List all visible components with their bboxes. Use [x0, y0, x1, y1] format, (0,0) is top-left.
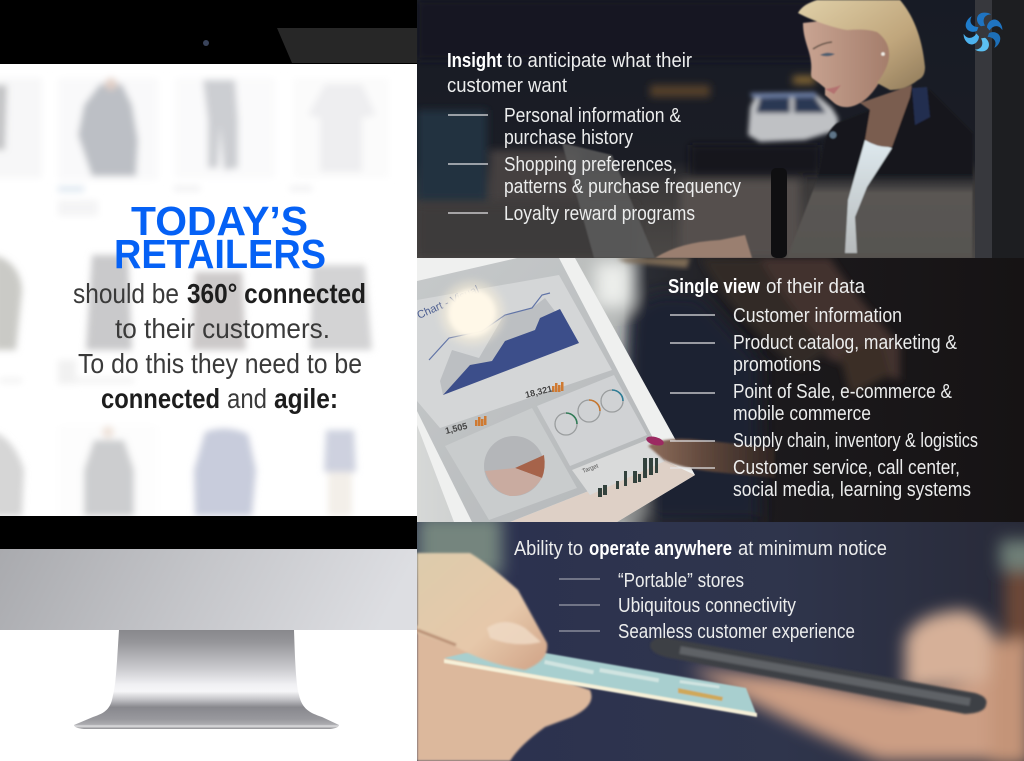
heading: today's retailers: RETAILERS — [114, 231, 326, 277]
dashboard cards — [417, 275, 665, 520]
neck — [860, 85, 912, 147]
phone — [650, 638, 987, 714]
thumb — [417, 553, 547, 670]
woman figure — [787, 0, 973, 258]
list: data items: Customer service, call center, — [733, 457, 960, 479]
text: single view heading — [668, 278, 866, 297]
hair — [798, 0, 925, 90]
window post — [975, 0, 992, 258]
list: data items: Customer information — [733, 305, 902, 327]
list: anywhere items — [559, 570, 855, 643]
list: insight items — [448, 105, 741, 225]
text: insight heading — [448, 52, 692, 92]
text: insight heading: customer want — [447, 75, 567, 97]
list: anywhere items: Ubiquitous connectivity — [618, 595, 796, 617]
intro text block: connected — [101, 383, 220, 414]
list: insight items: patterns & purchase frequency — [504, 176, 741, 198]
text: operate anywhere heading: Ability to — [514, 538, 583, 560]
intro text block: To do this they need to be — [78, 348, 362, 379]
monitor chin — [0, 549, 417, 630]
credit card — [444, 645, 757, 717]
chart labels: Target — [582, 463, 600, 475]
monitor illustration — [0, 0, 417, 729]
photo: tablet dashboard — [415, 258, 1024, 522]
text: insight heading: Insight — [447, 50, 502, 72]
photo: card payment — [417, 515, 1024, 761]
lens glare — [440, 281, 504, 345]
text: operate anywhere heading — [514, 540, 886, 559]
chart labels: Chart - Visual — [415, 284, 481, 322]
panel: insight — [417, 0, 1024, 258]
list: data items: promotions — [733, 354, 821, 376]
list: insight items: Personal information & — [504, 105, 682, 127]
list: data items: Point of Sale, e-commerce & — [733, 381, 953, 403]
intro text block: to their customers. — [115, 313, 330, 344]
hand on laptop — [655, 235, 752, 258]
pie chart — [484, 436, 544, 496]
list: data items — [670, 305, 978, 501]
intro text block: agile: — [274, 383, 338, 414]
text: operate anywhere heading: at minimum notice — [738, 538, 887, 560]
monitor bottom bezel — [0, 516, 417, 549]
bar charts — [598, 458, 658, 497]
heading: today's retailers — [114, 198, 326, 277]
text: single view heading: of their data — [766, 276, 866, 298]
list: anywhere items: “Portable” stores — [618, 570, 744, 592]
progress rings — [555, 390, 623, 435]
monitor top bezel — [0, 0, 417, 64]
chart labels: 18,321 — [524, 384, 553, 400]
list: data items: Product catalog, marketing & — [733, 332, 958, 354]
intro text block: should be — [73, 278, 179, 309]
chart labels: 1,505 — [444, 421, 468, 436]
monitor screen — [0, 64, 417, 516]
shirt — [845, 140, 892, 253]
photo: woman at laptop — [417, 0, 1024, 258]
monitor stand — [74, 630, 339, 729]
intro text block — [73, 278, 366, 414]
list: anywhere items: Seamless customer experience — [618, 621, 855, 643]
intro text block: 360° connected — [187, 278, 366, 309]
chart labels — [415, 284, 600, 475]
icon: company logo — [964, 12, 1002, 52]
heading: today's retailers: TODAY’S — [131, 198, 308, 244]
list: insight items: purchase history — [504, 127, 633, 149]
parked car — [748, 92, 838, 142]
icon: webcam — [203, 40, 209, 46]
area chart — [440, 298, 555, 395]
tablet body — [417, 258, 695, 522]
laptop — [562, 143, 655, 258]
text: single view heading: Single view — [668, 276, 760, 298]
blurred clothing catalogue — [0, 78, 389, 517]
bezel reflection — [510, 461, 695, 522]
list: data items: social media, learning systems — [733, 479, 971, 501]
text: insight heading: to anticipate what their — [507, 50, 692, 72]
panel: operate anywhere — [417, 515, 1024, 761]
tablet screen — [417, 258, 665, 522]
text: operate anywhere heading: operate anywhere — [589, 538, 732, 560]
bezel reflection wedge — [277, 28, 417, 63]
intro text block: and — [227, 383, 267, 414]
lower fingers — [417, 625, 592, 761]
jacket — [787, 88, 973, 258]
list: data items: mobile commerce — [733, 403, 871, 425]
finger pointing — [648, 439, 775, 478]
face — [803, 20, 892, 107]
list: insight items: Shopping preferences, — [504, 154, 677, 176]
list: insight items: Loyalty reward programs — [504, 203, 695, 225]
bollard — [771, 168, 787, 258]
panel: single view — [415, 258, 1024, 522]
